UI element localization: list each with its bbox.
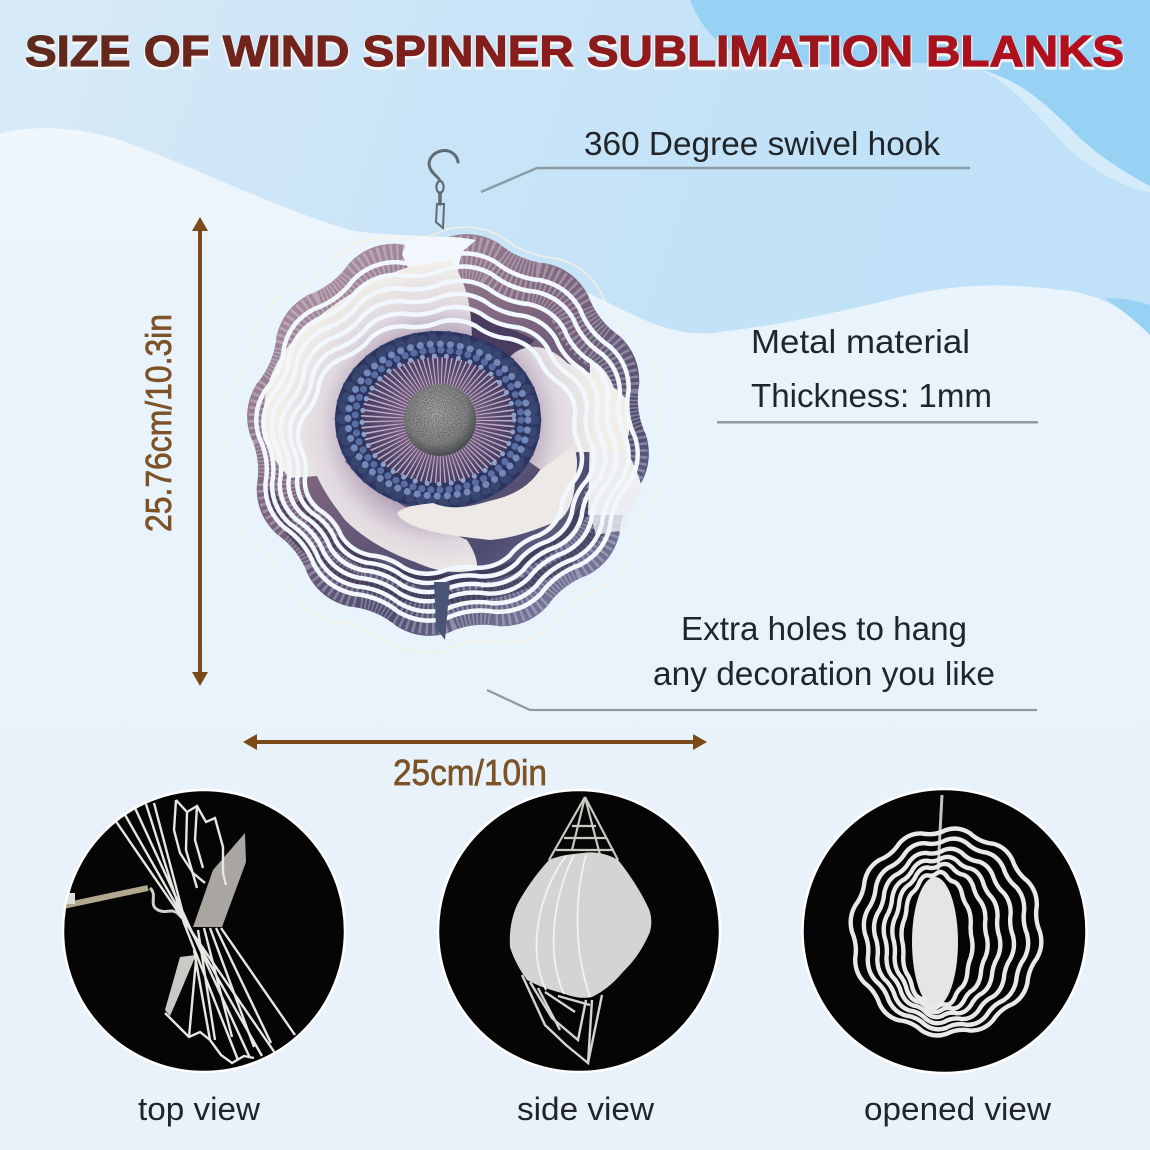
spinner: flower artwork bbox=[222, 227, 668, 653]
label: opened view: opened view bbox=[864, 1091, 1052, 1127]
flower centre bbox=[338, 334, 538, 506]
label: side view: side view bbox=[517, 1091, 655, 1127]
petal: front bbox=[397, 447, 577, 540]
hanger bbox=[938, 795, 942, 870]
dark lower crescent bbox=[268, 490, 615, 598]
top cap wires bbox=[549, 797, 618, 860]
lower blade bbox=[165, 955, 196, 1016]
label: extra holes: any decoration you like bbox=[653, 655, 995, 692]
label: metal material: Thickness: 1mm bbox=[751, 377, 992, 414]
icon: swivel hook bbox=[429, 151, 458, 228]
callout line: metal bbox=[717, 421, 1038, 424]
disc fold lines bbox=[537, 855, 590, 997]
hook rod bbox=[63, 888, 182, 918]
label: extra holes bbox=[653, 610, 995, 692]
label: extra holes: Extra holes to hang bbox=[681, 610, 967, 647]
panel: top view bbox=[63, 790, 345, 1072]
width label: 25cm/10in bbox=[393, 752, 547, 793]
inner plate bbox=[912, 877, 958, 1007]
title: SIZE OF WIND SPINNER SUBLIMATION BLANKS bbox=[25, 27, 1124, 76]
stem bbox=[434, 582, 450, 640]
faint halo bbox=[222, 227, 668, 653]
bottom cap wires bbox=[522, 975, 602, 1063]
panel: opened view bbox=[802, 789, 1086, 1073]
dark upper-right wedge bbox=[470, 310, 535, 362]
blank disc bbox=[510, 852, 651, 998]
title: SIZE OF WIND SPINNER SUBLIMATION BLANKS bbox=[25, 29, 1124, 78]
label: swivel hook: 360 Degree swivel hook bbox=[584, 125, 940, 162]
gray blade bbox=[193, 833, 246, 927]
height arrow bbox=[192, 217, 208, 686]
width arrow bbox=[243, 734, 707, 750]
callout line: holes bbox=[487, 690, 1037, 710]
wire lines bbox=[115, 800, 295, 1063]
panel: side view bbox=[438, 790, 720, 1072]
label: metal material: Metal material bbox=[751, 323, 970, 360]
wave rings bbox=[851, 829, 1041, 1035]
height label: 25.76cm/10.3in bbox=[138, 314, 179, 532]
label: metal material bbox=[751, 323, 992, 414]
petal: upper left bbox=[264, 262, 472, 478]
pale covers top and right bbox=[402, 237, 642, 535]
petal: lower left bbox=[310, 452, 477, 572]
striped outer bands bbox=[247, 234, 649, 636]
spinner gap rings bbox=[256, 253, 638, 621]
label: top view: top view bbox=[138, 1091, 261, 1127]
callout line: hook bbox=[481, 168, 970, 192]
petal: right bbox=[470, 347, 630, 475]
